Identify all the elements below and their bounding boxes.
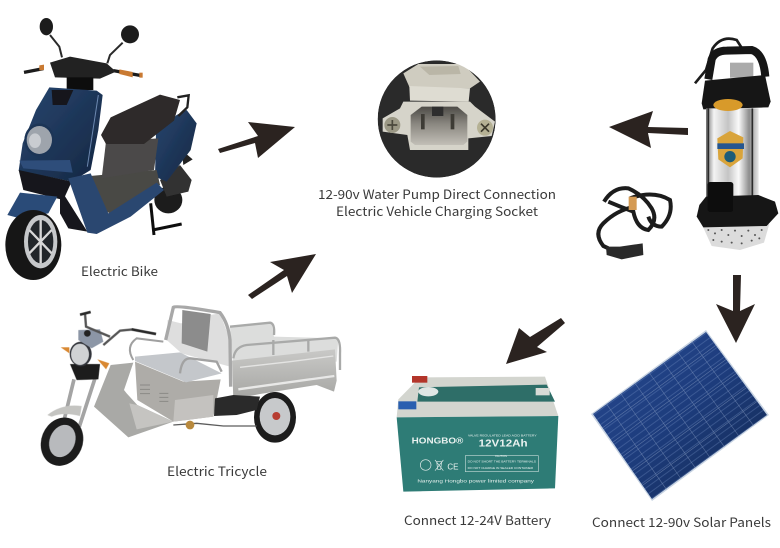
label: electric tricycle: Electric Tricycle bbox=[167, 461, 267, 480]
rear wheel bbox=[254, 392, 296, 443]
terminals bbox=[412, 376, 427, 383]
headlight assembly bbox=[70, 364, 100, 380]
front fork bbox=[63, 378, 95, 427]
cable loop on top bbox=[695, 39, 743, 83]
headlight bbox=[24, 123, 54, 157]
photo: solar panel bbox=[591, 330, 769, 501]
case front bbox=[397, 416, 558, 492]
socket plate bbox=[383, 102, 495, 150]
orange label bbox=[713, 99, 743, 111]
label: socket description: 12-90v Water Pump Direct Connection bbox=[318, 184, 556, 203]
front fender bbox=[7, 193, 57, 218]
motor cap bbox=[702, 75, 771, 109]
handle bbox=[708, 50, 765, 79]
battery printing: VALVE REGULATED LEAD ACID BATTERY bbox=[468, 433, 537, 437]
handlebar bbox=[85, 313, 133, 345]
screws bbox=[384, 117, 400, 133]
top latch bbox=[403, 64, 480, 88]
strainer bbox=[702, 224, 769, 250]
photo: electric tricycle bbox=[34, 307, 340, 472]
label: socket description: Electric Vehicle Charging Socket bbox=[336, 201, 538, 220]
mirrors bbox=[40, 18, 53, 35]
floor and body bbox=[90, 170, 160, 213]
axle parts bbox=[173, 423, 257, 426]
footboard bbox=[94, 363, 173, 437]
panel grid bbox=[602, 341, 758, 489]
plug bbox=[606, 243, 643, 259]
cargo rear interior bbox=[230, 323, 338, 368]
cargo box bbox=[232, 349, 337, 399]
photo: electric bike bbox=[5, 18, 197, 280]
caution box: DO NOT CHARGE IN SEALED CONTAINER bbox=[468, 466, 533, 470]
case top bbox=[397, 377, 558, 417]
steel cylinder bbox=[706, 108, 759, 202]
caution box bbox=[465, 454, 538, 472]
caution box: DO NOT SHORT THE BATTERY TERMINALS bbox=[468, 459, 536, 463]
arrow: pump to solar panel bbox=[716, 275, 755, 343]
handlebars bbox=[24, 69, 140, 75]
battery printing: Nanyang Hongbo power limited company bbox=[417, 478, 535, 483]
battery printing bbox=[412, 433, 538, 483]
arrow: bike to socket bbox=[218, 122, 295, 158]
front wheel bbox=[5, 210, 61, 280]
seat bbox=[135, 352, 222, 382]
volute base bbox=[697, 195, 778, 227]
battery printing: CE bbox=[447, 462, 458, 471]
seat box bbox=[135, 362, 221, 422]
label: solar panels: Connect 12-90v Solar Panels bbox=[592, 512, 771, 531]
rear wheel and motor bbox=[154, 187, 182, 213]
photo: battery bbox=[397, 376, 558, 492]
kickstand bbox=[151, 203, 182, 235]
arrow: pump to socket bbox=[609, 111, 688, 148]
label: socket description bbox=[318, 184, 556, 220]
arrow: tricycle to socket bbox=[248, 254, 316, 299]
plug cavity bbox=[411, 107, 467, 145]
coiled cable bbox=[598, 188, 671, 248]
under body dark bbox=[19, 170, 72, 200]
cab back frame bbox=[167, 313, 230, 367]
photo: charging socket bbox=[378, 60, 496, 178]
battery printing: 12V12Ah bbox=[479, 439, 528, 450]
arrow: solar panel to battery bbox=[506, 318, 565, 364]
label: electric bike: Electric Bike bbox=[81, 261, 158, 280]
battery printing: HONGBO® bbox=[412, 435, 464, 445]
caution box: CAUTION bbox=[495, 454, 507, 458]
front wheel bbox=[34, 411, 90, 472]
seat bbox=[101, 95, 180, 144]
shield badge bbox=[717, 131, 743, 167]
fender bbox=[47, 406, 82, 417]
front shield bbox=[19, 87, 103, 182]
orange tie bbox=[629, 197, 637, 210]
label: battery: Connect 12-24V Battery bbox=[404, 510, 552, 529]
rear blue panel bbox=[155, 110, 197, 182]
photo: water pump and cable bbox=[598, 39, 778, 259]
recycle and bin icons bbox=[420, 460, 443, 471]
outlet bbox=[707, 182, 733, 212]
under seat panel bbox=[102, 138, 158, 178]
